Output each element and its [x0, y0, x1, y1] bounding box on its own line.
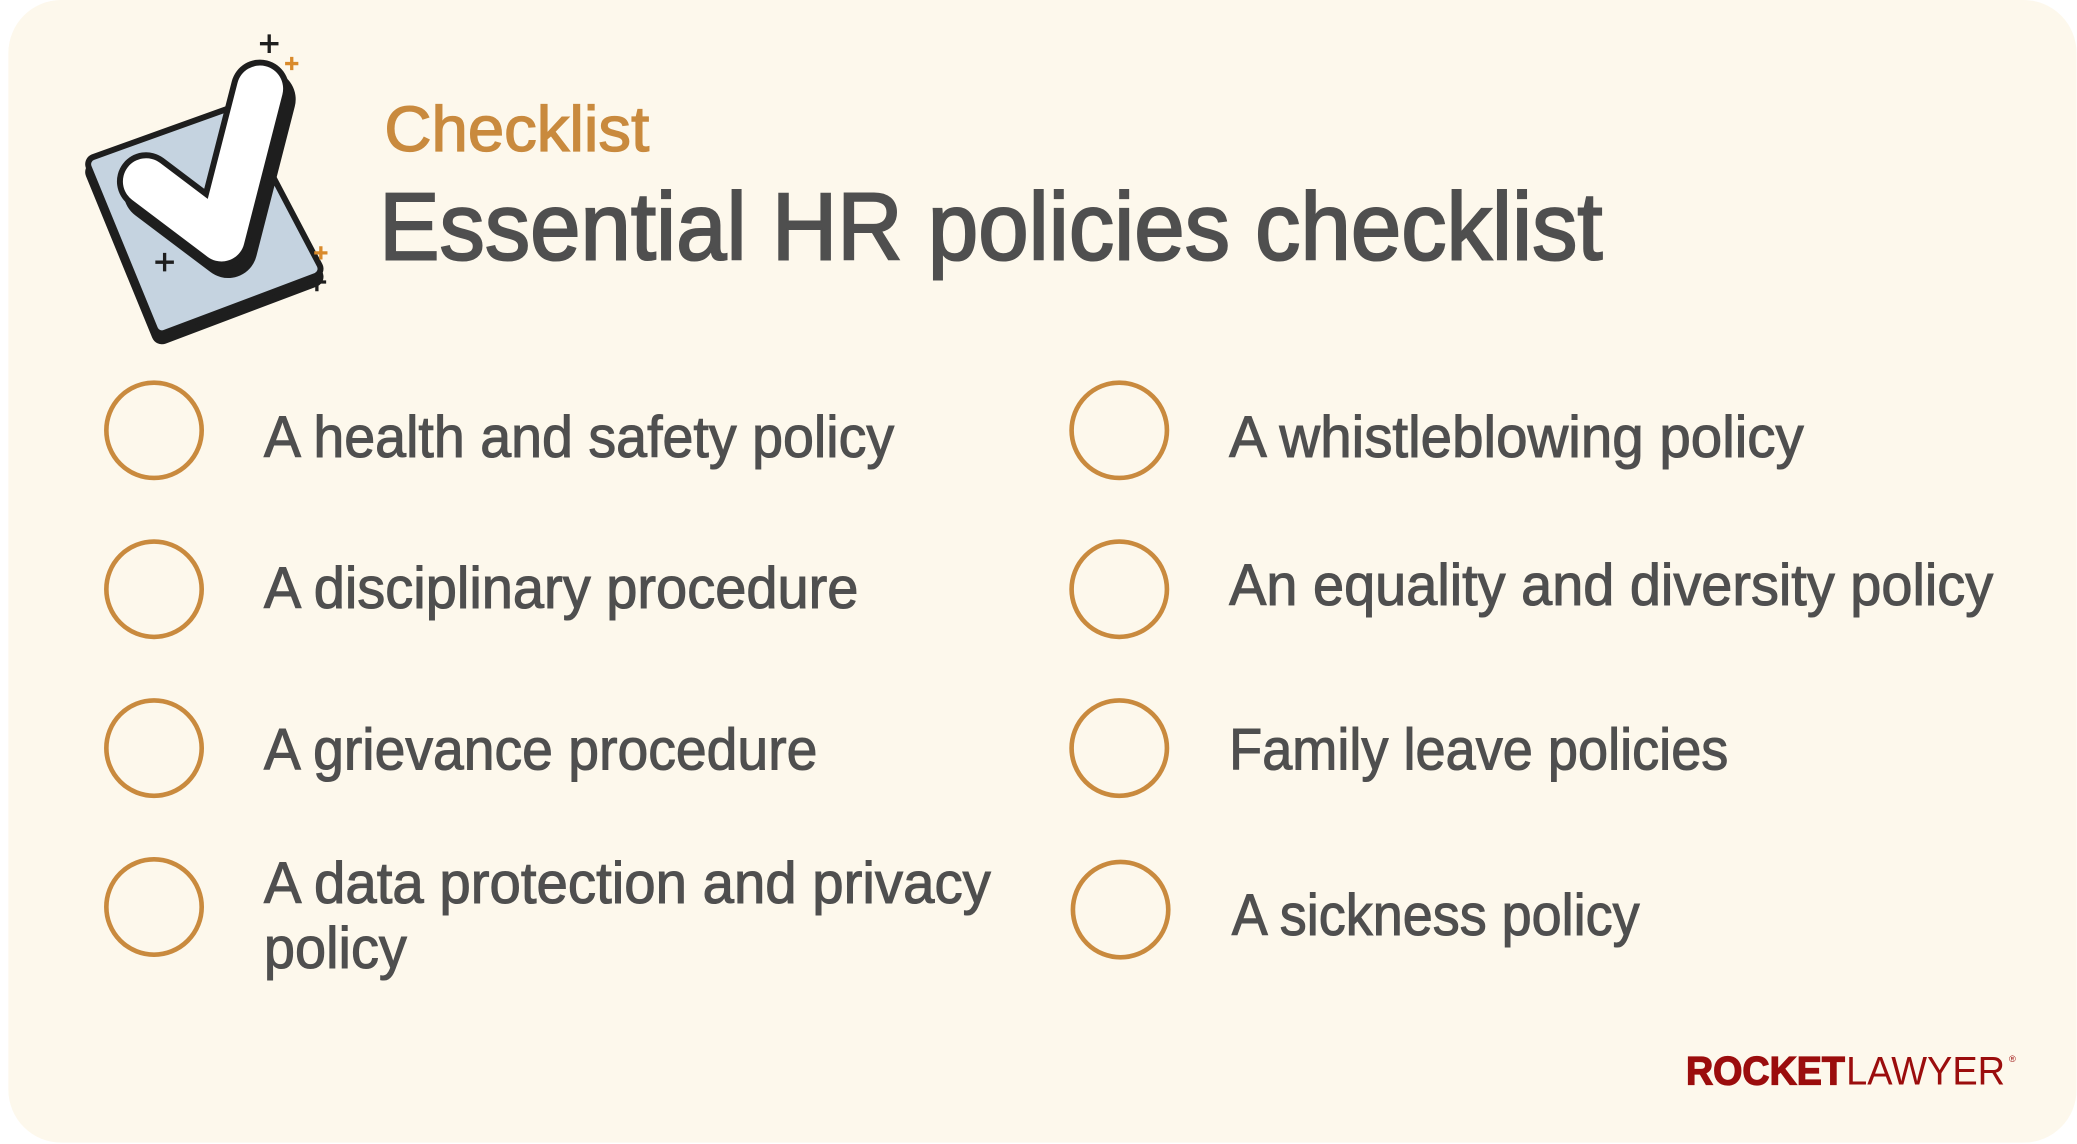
- checklist items: policy: [264, 916, 408, 981]
- checklist items: An equality and diversity policy: [1229, 553, 1994, 618]
- checklist items: A disciplinary procedure: [264, 556, 858, 621]
- checklist items: A sickness policy: [1232, 883, 1640, 948]
- subtitle: Checklist: [384, 94, 650, 165]
- checklist items: Family leave policies: [1229, 717, 1728, 782]
- icon: checkbox with checkmark: [96, 34, 327, 334]
- checklist items: [106, 383, 1994, 981]
- title: Essential HR policies checklist: [379, 175, 1603, 281]
- logo: Rocket Lawyer: [1686, 1049, 2016, 1093]
- logo: Rocket Lawyer: LAWYER: [1846, 1049, 2005, 1093]
- checklist items: A data protection and privacy: [264, 851, 992, 916]
- checklist items: A whistleblowing policy: [1229, 405, 1805, 470]
- checklist items: A health and safety policy: [264, 405, 895, 470]
- checklist items: A grievance procedure: [264, 717, 817, 782]
- logo: Rocket Lawyer: ®: [2009, 1054, 2016, 1064]
- logo: Rocket Lawyer: ROCKET: [1686, 1049, 1845, 1093]
